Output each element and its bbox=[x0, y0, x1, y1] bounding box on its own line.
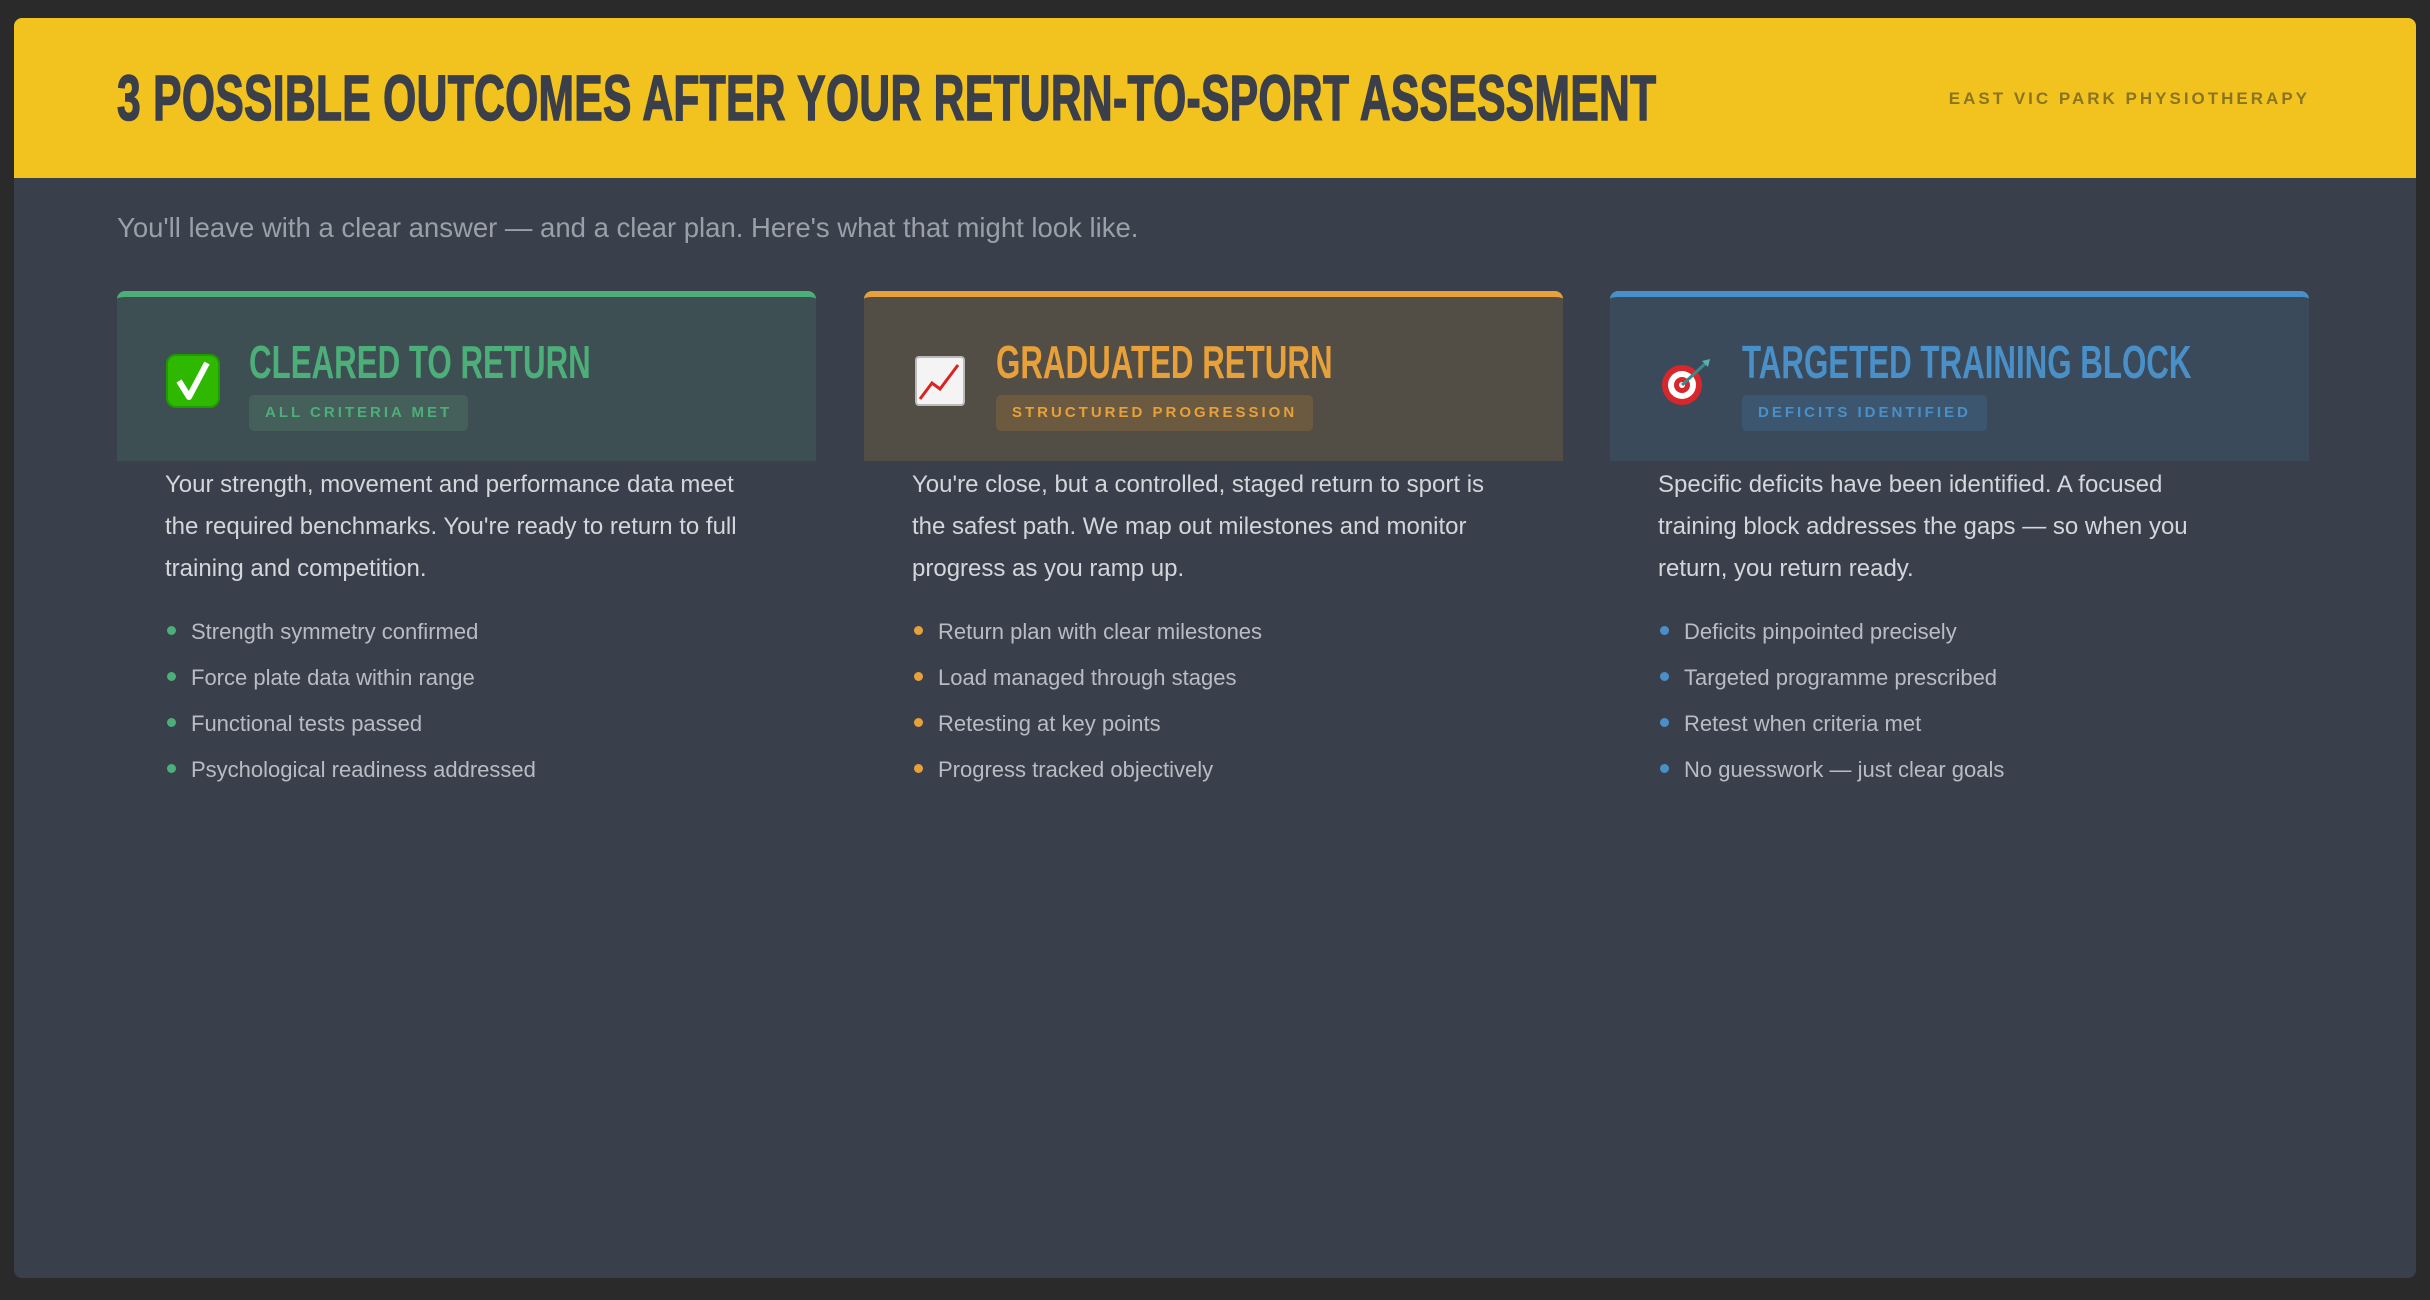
description: the required benchmarks. You're ready to return to full bbox=[165, 513, 737, 540]
description: progress as you ramp up. bbox=[912, 555, 1184, 582]
panel: cleared to return bbox=[117, 291, 816, 782]
badge: DEFICITS IDENTIFIED bbox=[1758, 404, 1971, 421]
description: training and competition. bbox=[165, 555, 426, 582]
bullet list: Strength symmetry confirmed bbox=[191, 619, 478, 644]
bullet list: Retesting at key points bbox=[938, 711, 1161, 736]
description bbox=[165, 471, 737, 582]
description bbox=[912, 471, 1484, 582]
bullet list: Deficits pinpointed precisely bbox=[1684, 619, 1957, 644]
description: Specific deficits have been identified. A focused bbox=[1658, 471, 2162, 498]
description: the safest path. We map out milestones and monitor bbox=[912, 513, 1467, 540]
bullet list: Targeted programme prescribed bbox=[1684, 665, 1997, 690]
card header bbox=[864, 291, 1563, 461]
bullet list: Progress tracked objectively bbox=[938, 757, 1213, 782]
badge: STRUCTURED PROGRESSION bbox=[1012, 404, 1297, 421]
icon: check bbox=[166, 354, 220, 408]
card title: TARGETED TRAINING BLOCK bbox=[1742, 336, 2191, 388]
bullet list: Functional tests passed bbox=[191, 711, 422, 736]
description: You're close, but a controlled, staged return to sport is bbox=[912, 471, 1484, 498]
bullet list: Return plan with clear milestones bbox=[938, 619, 1262, 644]
bullet list bbox=[914, 619, 1262, 782]
bullet list: Load managed through stages bbox=[938, 665, 1236, 690]
card title: GRADUATED RETURN bbox=[996, 336, 1333, 388]
bullet list: Retest when criteria met bbox=[1684, 711, 1921, 736]
badge bbox=[249, 395, 468, 431]
description: training block addresses the gaps — so when you bbox=[1658, 513, 2188, 540]
bullet list bbox=[167, 619, 536, 782]
description: return, you return ready. bbox=[1658, 555, 1914, 582]
badge bbox=[996, 395, 1313, 431]
panel: graduated return bbox=[864, 291, 1563, 782]
bullet list bbox=[1660, 619, 2004, 782]
header bar bbox=[14, 18, 2416, 178]
bullet list: Psychological readiness addressed bbox=[191, 757, 536, 782]
bullet list: No guesswork — just clear goals bbox=[1684, 757, 2004, 782]
panel: targeted training block bbox=[1610, 291, 2309, 782]
card title: CLEARED TO RETURN bbox=[249, 336, 591, 388]
subtitle: You'll leave with a clear answer — and a clear plan. Here's what that might look like. bbox=[117, 212, 1138, 243]
icon: target bbox=[1662, 359, 1710, 405]
description bbox=[1658, 471, 2188, 582]
badge: ALL CRITERIA MET bbox=[265, 404, 452, 421]
icon: chart bbox=[915, 356, 965, 406]
title: 3 POSSIBLE OUTCOMES AFTER YOUR RETURN-TO-SPORT ASSESSMENT bbox=[117, 62, 1656, 134]
brand name: EAST VIC PARK PHYSIOTHERAPY bbox=[1949, 89, 2310, 108]
description: Your strength, movement and performance data meet bbox=[165, 471, 734, 498]
card header bbox=[1610, 291, 2309, 461]
bullet list: Force plate data within range bbox=[191, 665, 475, 690]
badge bbox=[1742, 395, 1987, 431]
card header bbox=[117, 291, 816, 461]
